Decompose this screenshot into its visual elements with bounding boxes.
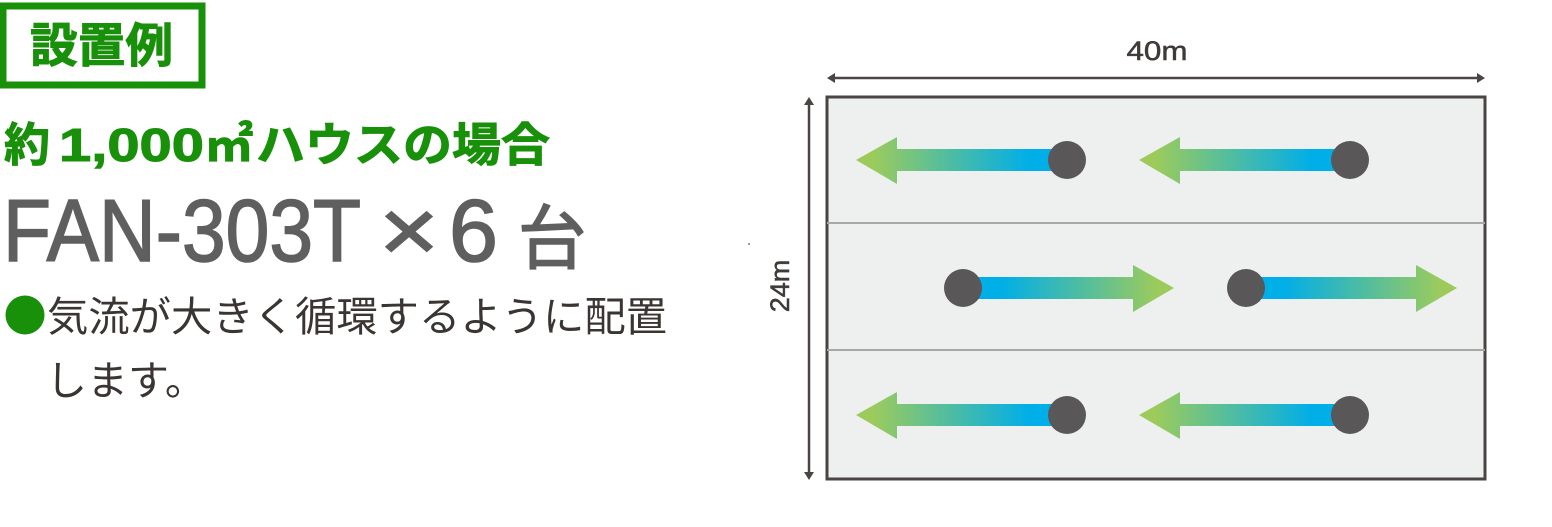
badge: 設置例: 設置例 <box>30 19 173 72</box>
heading: area: 約 <box>4 119 50 171</box>
stray dot <box>748 243 750 245</box>
width dimension: 40m <box>827 36 1485 83</box>
heading: area: 1,000 <box>59 119 204 171</box>
icon: green bullet <box>6 296 44 334</box>
airflow fan: row 3 right <box>1139 392 1369 439</box>
model and quantity <box>3 181 586 280</box>
badge: 設置例 <box>3 6 202 85</box>
width dimension: 40m: 40m <box>1126 36 1188 66</box>
airflow fan: row 3 left <box>856 392 1086 439</box>
airflow fan: row 1 left <box>856 137 1086 184</box>
airflow fan: row 1 right <box>1139 137 1369 184</box>
heading: area: ハウスの場合 <box>256 119 550 171</box>
model and quantity: 6 <box>449 181 498 280</box>
model and quantity: × <box>379 181 439 280</box>
bullet note <box>6 294 667 404</box>
heading: area <box>4 119 550 171</box>
bullet note: 気流が大きく循環するように配置 <box>47 294 667 340</box>
airflow fan: row 2 left <box>944 265 1174 312</box>
height dimension: 24m <box>765 97 814 480</box>
airflow fan: row 2 right <box>1227 265 1457 312</box>
height dimension: 24m: 24m <box>765 260 795 312</box>
heading: area: ㎡ <box>205 119 253 171</box>
model and quantity: 台 <box>518 200 586 278</box>
bullet note: します。 <box>46 358 206 404</box>
model and quantity: FAN-303T <box>3 181 361 280</box>
greenhouse plan <box>827 97 1485 479</box>
